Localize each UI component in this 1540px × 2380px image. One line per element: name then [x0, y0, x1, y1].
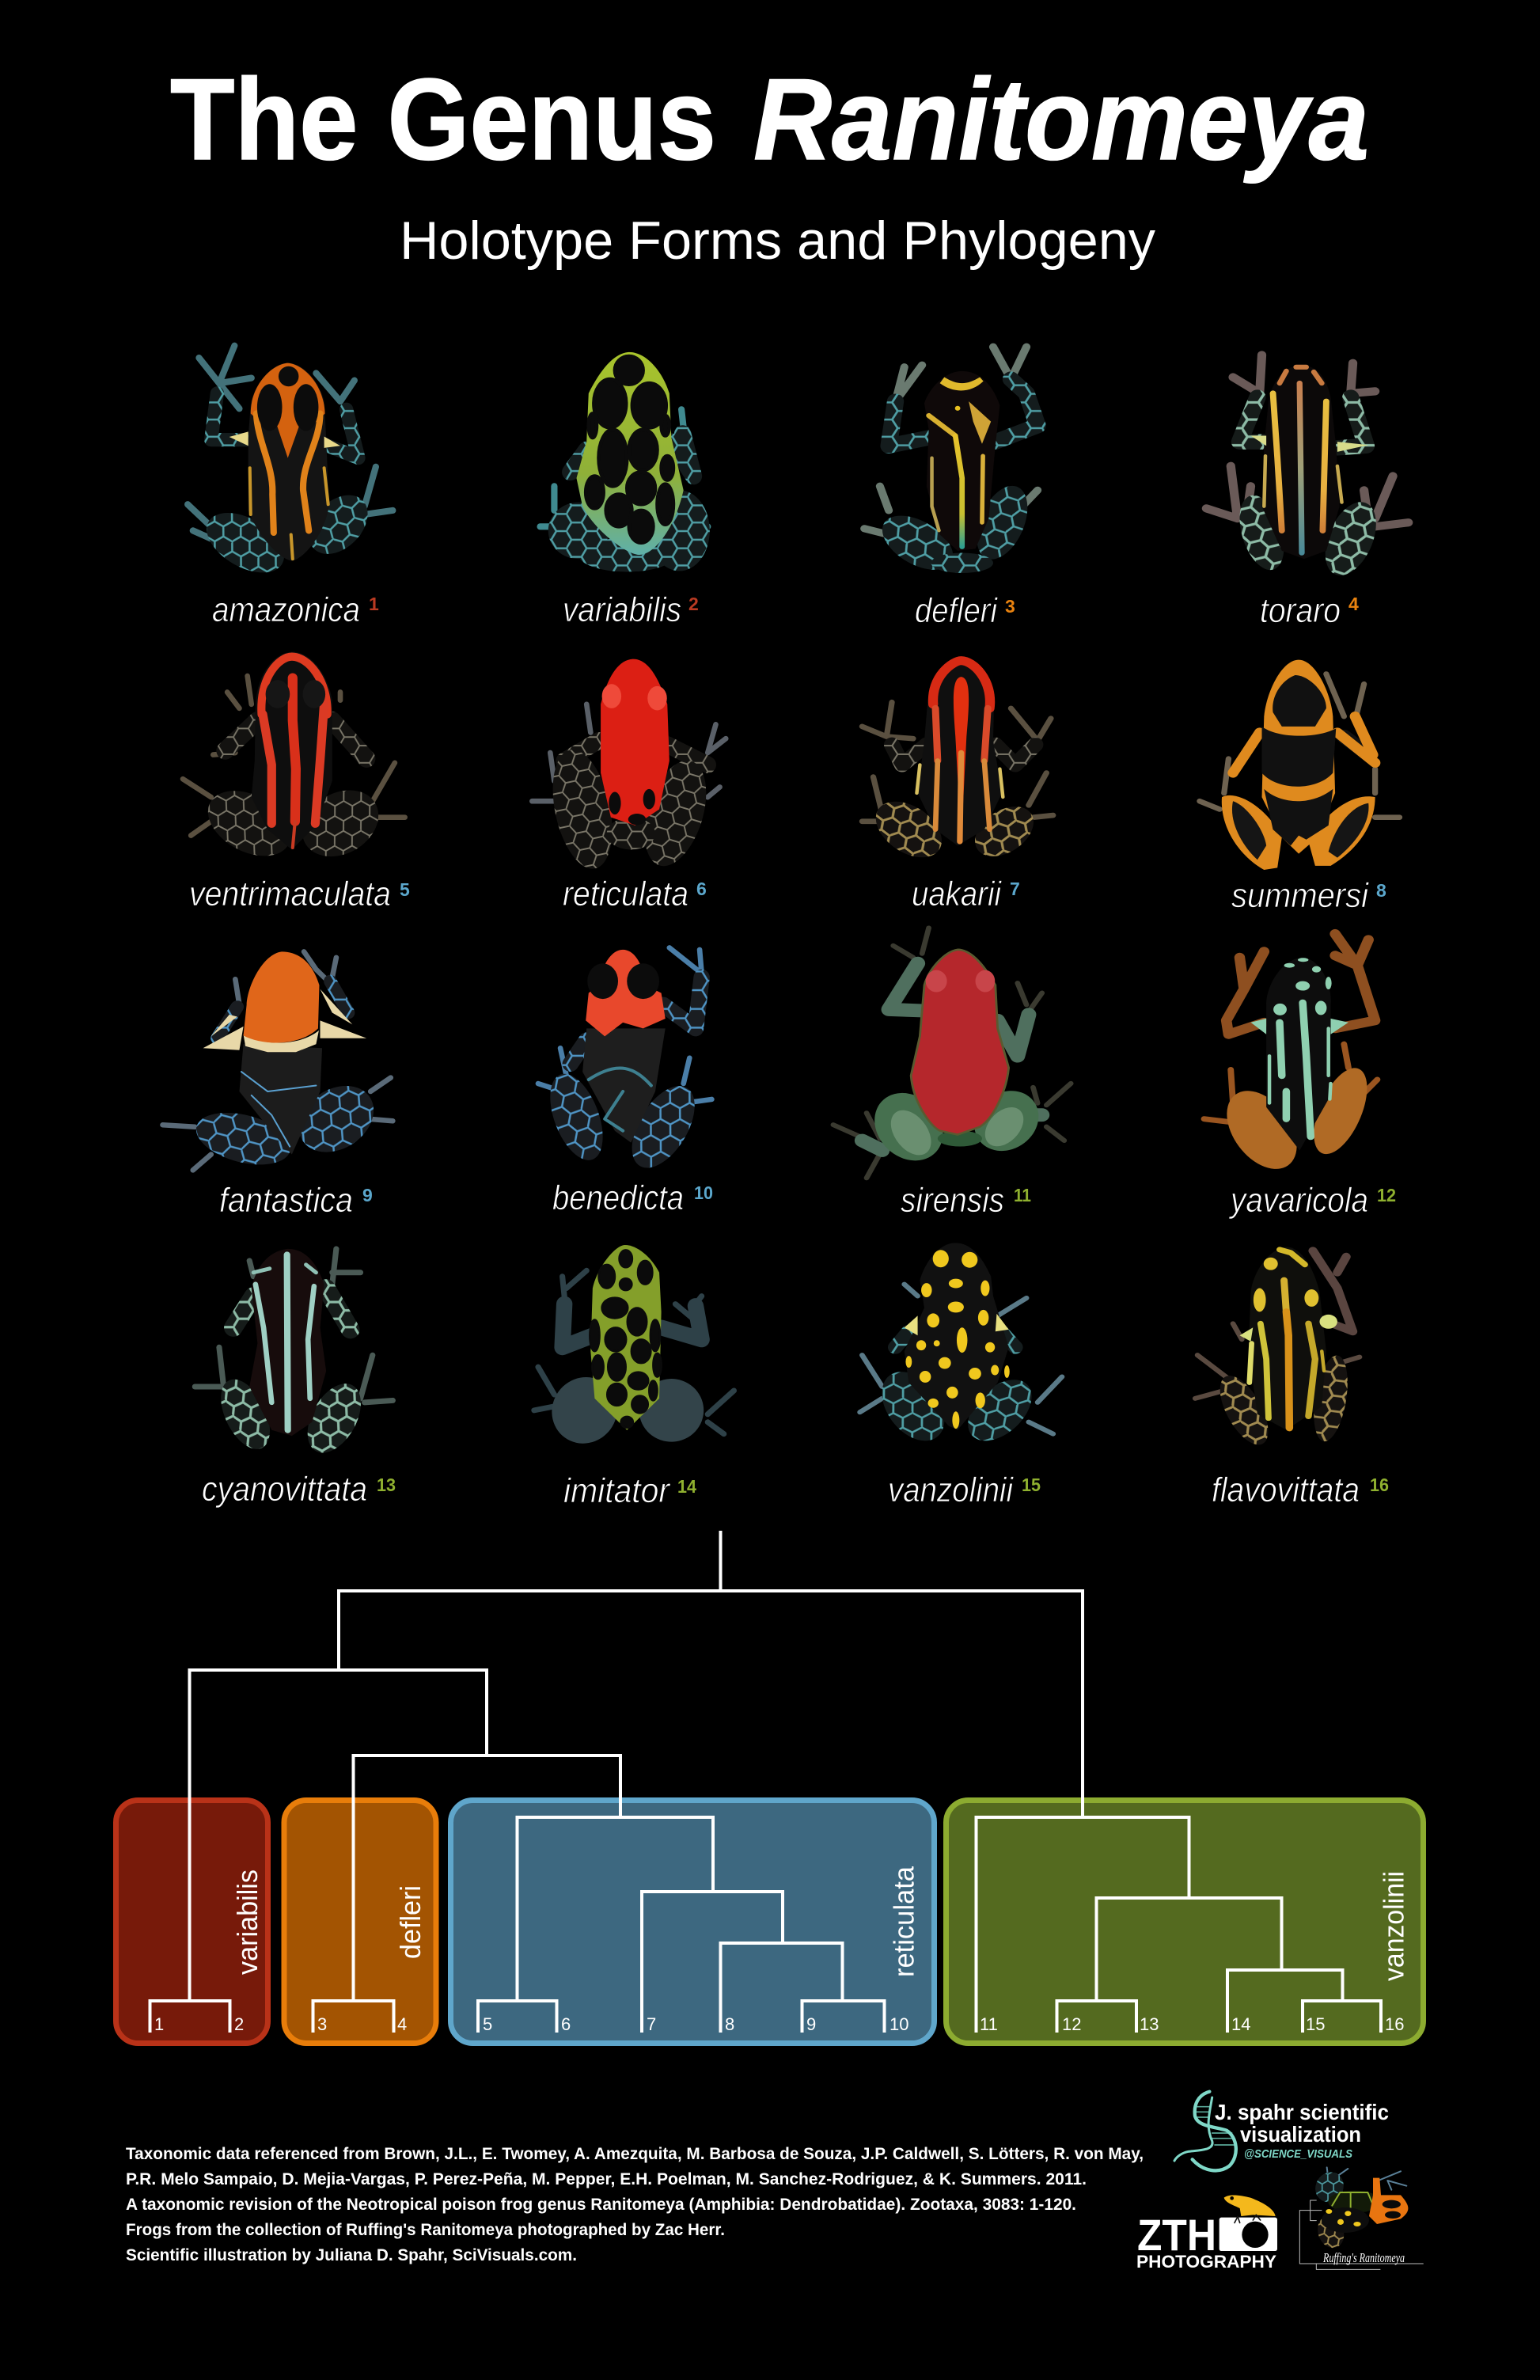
species card: reticulata — [532, 659, 726, 913]
name: uakarii: uakarii — [912, 875, 1002, 913]
frog: uakarii — [862, 657, 1053, 868]
clade number 3: 3 — [1005, 596, 1015, 617]
tip numbers: 7 — [647, 2014, 656, 2034]
frog: fantastica — [163, 951, 393, 1174]
clade number 9: 9 — [362, 1185, 373, 1205]
name: cyanovittata: cyanovittata — [202, 1470, 367, 1509]
frog: yavaricola — [1204, 934, 1378, 1180]
frog: defleri — [864, 347, 1037, 581]
clade number 14: 14 — [677, 1476, 696, 1497]
tip numbers: 6 — [561, 2014, 571, 2034]
species card: flavovittata — [1195, 1247, 1389, 1509]
name: vanzolinii: vanzolinii — [888, 1471, 1014, 1509]
species card: uakarii — [862, 657, 1053, 913]
tip numbers: 15 — [1306, 2014, 1325, 2034]
clade label: vanzolinii: vanzolinii — [1377, 1871, 1410, 1981]
species card: defleri — [864, 347, 1037, 630]
logo: J. Spahr Scientific Visualization: J. spahr scientific — [1215, 2100, 1389, 2124]
clade number 8: 8 — [1376, 880, 1386, 901]
species card: imitator — [534, 1245, 734, 1510]
frog: sirensis — [833, 928, 1071, 1178]
logo: J. Spahr Scientific Visualization — [1174, 2092, 1389, 2170]
clade number 13: 13 — [377, 1475, 396, 1495]
name: summersi: summersi — [1231, 876, 1369, 915]
phylogeny tree — [150, 1532, 1381, 2031]
credits text block: Frogs from the collection of Ruffing's Ranitomeya photographed by Zac Herr. — [126, 2221, 725, 2239]
tip numbers: 9 — [806, 2014, 816, 2034]
clade number 16: 16 — [1370, 1475, 1389, 1495]
name: flavovittata: flavovittata — [1212, 1471, 1360, 1509]
frog: summersi — [1200, 660, 1399, 870]
clade label: variabilis: variabilis — [231, 1869, 264, 1975]
frog: cyanovittata — [195, 1249, 393, 1461]
frog: amazonica — [188, 346, 393, 585]
name: fantastica: fantastica — [219, 1181, 353, 1220]
species card: fantastica — [163, 951, 393, 1220]
frog: flavovittata — [1195, 1247, 1360, 1451]
species card: amazonica — [188, 346, 393, 629]
name: sirensis: sirensis — [901, 1181, 1004, 1220]
logo: Ruffing's Ranitomeya — [1299, 2167, 1423, 2269]
logo: J. Spahr Scientific Visualization: visualization — [1240, 2122, 1361, 2147]
credits text block: P.R. Melo Sampaio, D. Mejia-Vargas, P. Perez-Peña, M. Pepper, E.H. Poelman, M. Sanchez-Rodriguez, & K. Summers. 2011. — [126, 2170, 1087, 2188]
credits text block — [126, 2145, 1144, 2264]
frog: variabilis — [541, 352, 710, 571]
panel: vanzolinii clade box — [946, 1800, 1423, 2044]
logo: ZTH Photography — [1136, 2196, 1277, 2272]
clade number 7: 7 — [1010, 879, 1020, 899]
clade number 12: 12 — [1377, 1185, 1396, 1205]
credits text block: Taxonomic data referenced from Brown, J.L., E. Twomey, A. Amezquita, M. Barbosa de Souza, J.P. Caldwell, S. Lötters, R. von May, — [126, 2145, 1144, 2163]
species card: sirensis — [833, 928, 1071, 1220]
clade number 15: 15 — [1022, 1475, 1041, 1495]
species card: cyanovittata — [195, 1249, 396, 1509]
tip numbers: 3 — [317, 2014, 327, 2034]
name: yavaricola: yavaricola — [1228, 1181, 1368, 1220]
species card: summersi — [1200, 660, 1399, 915]
name: toraro: toraro — [1260, 591, 1341, 630]
tip numbers: 13 — [1140, 2014, 1159, 2034]
name: imitator: imitator — [563, 1471, 671, 1510]
clade number 5: 5 — [400, 879, 410, 900]
tip numbers: 16 — [1385, 2014, 1404, 2034]
tip numbers — [154, 2014, 1404, 2034]
frog: toraro — [1206, 355, 1409, 582]
panel: reticulata clade box — [451, 1800, 934, 2044]
species card: variabilis — [541, 352, 710, 629]
icon: composite frog — [1299, 2167, 1423, 2269]
species card: yavaricola — [1204, 934, 1396, 1220]
name: amazonica: amazonica — [212, 590, 360, 629]
clade number 1: 1 — [369, 594, 379, 614]
tip numbers: 8 — [725, 2014, 734, 2034]
clade number 2: 2 — [688, 594, 699, 614]
logo: ZTH Photography: PHOTOGRAPHY — [1136, 2252, 1276, 2272]
species card: toraro — [1206, 355, 1409, 630]
clade label: defleri: defleri — [394, 1885, 427, 1959]
title: Ranitomeya — [753, 55, 1369, 184]
logo: J. Spahr Scientific Visualization: @SCIENCE_VISUALS — [1244, 2147, 1352, 2161]
name: ventrimaculata: ventrimaculata — [189, 875, 391, 913]
tip numbers: 1 — [154, 2014, 164, 2034]
credits text block: Scientific illustration by Juliana D. Spahr, SciVisuals.com. — [126, 2246, 577, 2264]
clade label: reticulata: reticulata — [888, 1866, 920, 1977]
species card: ventrimaculata — [183, 651, 410, 913]
icon: DNA S — [1174, 2092, 1236, 2170]
tip numbers: 2 — [234, 2014, 244, 2034]
name: benedicta: benedicta — [552, 1179, 684, 1217]
tip numbers: 11 — [980, 2014, 998, 2034]
frog: ventrimaculata — [183, 651, 405, 870]
title: The Genus — [170, 55, 716, 184]
credits text block: A taxonomic revision of the Neotropical poison frog genus Ranitomeya (Amphibia: Dendrobatidae). Zootaxa, 3083: 1-120. — [126, 2196, 1076, 2214]
frog: imitator — [534, 1245, 734, 1454]
logo: ZTH Photography: ZTH — [1137, 2210, 1216, 2260]
clade number 6: 6 — [696, 879, 707, 899]
title — [170, 55, 1369, 184]
panel: variabilis clade box — [116, 1800, 267, 2044]
subtitle: Holotype Forms and Phylogeny — [400, 211, 1155, 271]
clade number 11: 11 — [1014, 1185, 1031, 1205]
frog: reticulata — [532, 659, 726, 875]
species card: vanzolinii — [860, 1243, 1062, 1509]
name: reticulata: reticulata — [563, 875, 688, 913]
tip numbers: 10 — [889, 2014, 908, 2034]
logo: Ruffing's Ranitomeya: Ruffing's Ranitomeya — [1322, 2250, 1405, 2265]
panel: defleri clade box — [284, 1800, 436, 2044]
tip numbers: 4 — [397, 2014, 407, 2034]
tip numbers: 12 — [1062, 2014, 1081, 2034]
frog: vanzolinii — [860, 1243, 1062, 1452]
icon: camera with frog — [1219, 2196, 1277, 2251]
clade number 4: 4 — [1348, 594, 1359, 614]
clade number 10: 10 — [694, 1182, 713, 1203]
tip numbers: 14 — [1231, 2014, 1250, 2034]
frog: benedicta — [538, 947, 711, 1178]
tip numbers: 5 — [483, 2014, 492, 2034]
name: variabilis: variabilis — [563, 590, 681, 629]
name: defleri: defleri — [915, 591, 998, 630]
species card: benedicta — [538, 947, 713, 1217]
